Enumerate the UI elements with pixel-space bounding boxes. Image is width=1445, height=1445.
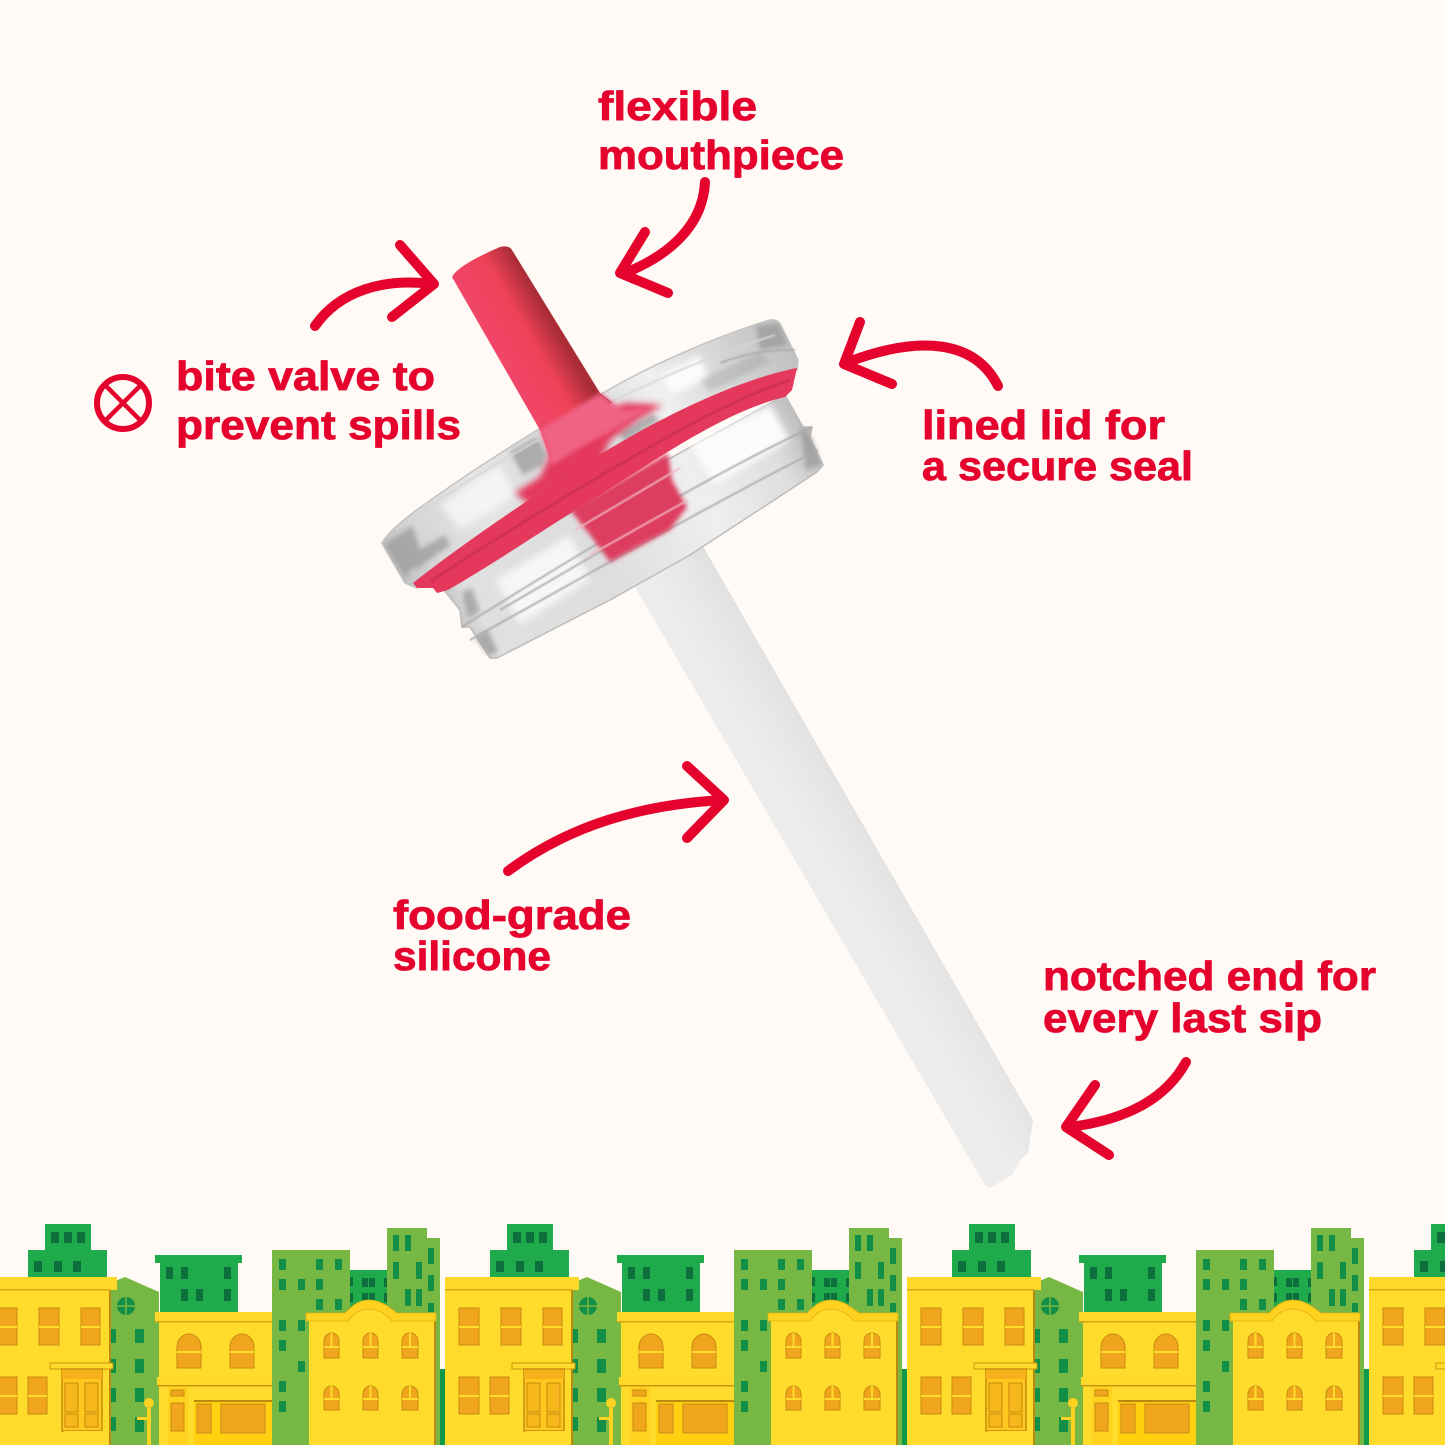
mouthpiece <box>452 246 612 465</box>
arrow: to notched end <box>1066 1062 1186 1155</box>
label: notched end: notched end for <box>1043 953 1376 999</box>
icon: bite valve crossed circle <box>97 377 149 429</box>
label: bite valve: prevent spills <box>176 402 461 448</box>
city skyline <box>0 1224 1445 1445</box>
label: flexible mouthpiece: flexible <box>598 83 757 129</box>
mouthpiece flare <box>540 393 650 465</box>
lid lower body <box>440 395 823 658</box>
label: bite valve: bite valve to <box>176 353 435 399</box>
label: food-grade silicone: food-grade <box>393 892 631 938</box>
lid upper rim <box>382 320 798 588</box>
arrow: to mouthpiece <box>620 182 705 293</box>
lid thread lines <box>395 335 818 640</box>
lid highlights <box>440 355 790 625</box>
red patch under mouthpiece <box>515 403 663 505</box>
label: flexible mouthpiece: mouthpiece <box>598 132 844 178</box>
arrow: to bite valve <box>315 245 434 326</box>
red inner column <box>570 453 687 562</box>
label: flexible mouthpiece <box>598 83 844 178</box>
label: lined lid <box>922 402 1193 489</box>
silicone straw <box>628 536 1033 1188</box>
label: bite valve <box>176 353 461 448</box>
label: food-grade silicone: silicone <box>393 933 551 979</box>
label: notched end <box>1043 953 1376 1041</box>
label: food-grade silicone <box>393 892 631 979</box>
red seal band <box>413 368 797 593</box>
label: lined lid: a secure seal <box>922 443 1193 489</box>
label: notched end: every last sip <box>1043 995 1322 1041</box>
product: straw lid <box>382 246 1033 1188</box>
lid shadows <box>385 324 821 655</box>
column thread highlights <box>575 468 688 555</box>
arrow: to straw <box>508 766 724 871</box>
arrow: to lid <box>844 322 998 386</box>
seal band grooves <box>430 380 790 582</box>
label: lined lid: lined lid for <box>922 402 1165 448</box>
